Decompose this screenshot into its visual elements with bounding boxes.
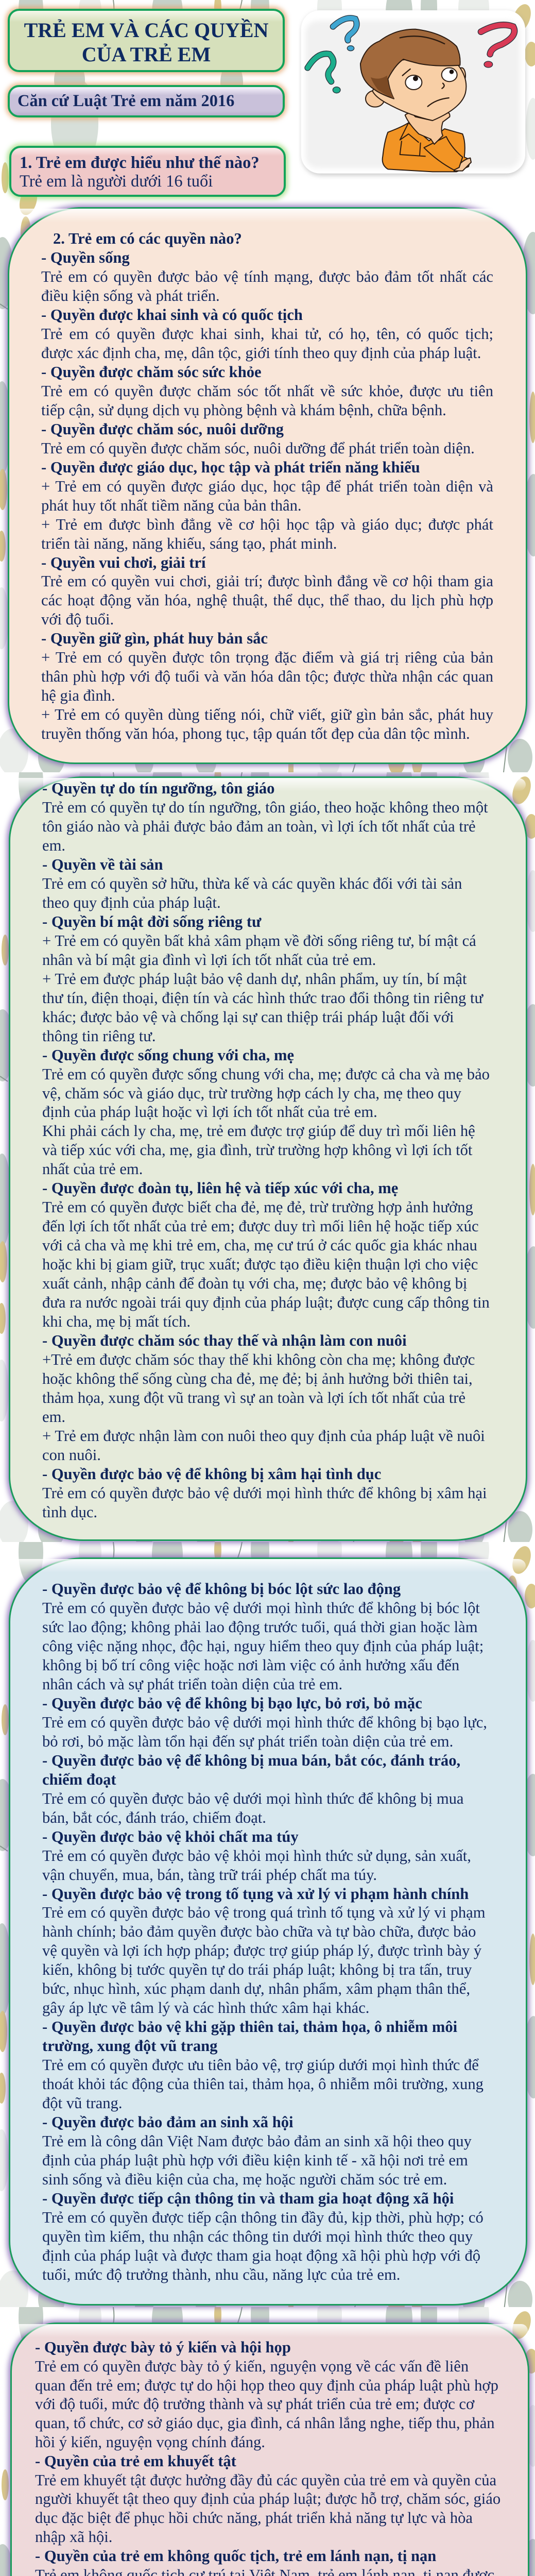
rights text list 3: bán, bắt cóc, đánh tráo, chiếm đoạt. xyxy=(42,1809,266,1826)
rights text list 1: các hoạt động văn hóa, nghệ thuật, thể dục, thể thao, du lịch phù hợp xyxy=(41,591,493,609)
rights text list 3: trường, xung đột vũ trang xyxy=(42,2037,217,2055)
title xyxy=(8,9,285,72)
rights text list 1: tiếp cận, sử dụng dịch vụ phòng bệnh và khám bệnh, chữa bệnh. xyxy=(41,401,446,419)
rights text list 2: Trẻ em có quyền tự do tín ngưỡng, tôn giáo, theo hoặc không theo một xyxy=(42,799,488,816)
rights text list 1: Trẻ em có quyền được bảo vệ tính mạng, được bảo đảm tốt nhất các xyxy=(41,268,493,285)
panel: rights part 2 xyxy=(9,776,527,1541)
rights text list 2: đưa ra nước ngoài trái quy định của pháp luật; được cung cấp thông tin xyxy=(42,1294,490,1311)
rights text list 1: - Quyền được chăm sóc sức khỏe xyxy=(41,363,262,381)
rights text list 2: - Quyền bí mật đời sống riêng tư xyxy=(42,913,261,930)
rights text list 2: xuất cảnh, nhập cảnh để đoàn tụ với cha, mẹ; được bảo vệ không bị xyxy=(42,1275,467,1292)
rights text list 4: người khuyết tật theo quy định của pháp luật; được hỗ trợ, chăm sóc, giáo xyxy=(35,2490,501,2507)
rights text list 2: Khi phải cách ly cha, mẹ, trẻ em được trợ giúp để duy trì mối liên hệ xyxy=(42,1122,475,1140)
rights text list 4: với độ tuổi, mức độ trưởng thành và sự phát triển của trẻ em; được cơ xyxy=(35,2395,474,2413)
rights text list 1: + Trẻ em có quyền được tôn trọng đặc điểm và giá trị riêng của bản xyxy=(41,649,493,666)
rights text list 2: hoặc không thể sống cùng cha đẻ, mẹ đẻ; bị ảnh hưởng bởi thiên tai, xyxy=(42,1370,473,1387)
rights text list 2: - Quyền được bảo vệ để không bị xâm hại tình dục xyxy=(42,1465,381,1483)
rights text list 3: - Quyền được bảo vệ khi gặp thiên tai, thảm họa, ô nhiễm môi xyxy=(42,2018,457,2036)
rights text list 2: thư tín, điện thoại, điện tín và các hình thức trao đổi thông tin riêng tư xyxy=(42,989,483,1007)
rights text list 3: Trẻ em có quyền được bảo vệ khỏi mọi hình thức sử dụng, sản xuất, xyxy=(42,1847,471,1865)
rights text list 2: khi cha, mẹ bị mất tích. xyxy=(42,1313,191,1330)
rights text list 1: Trẻ em có quyền được chăm sóc tốt nhất về sức khỏe, được ưu tiên xyxy=(41,382,493,400)
rights text list 1: - Quyền được khai sinh và có quốc tịch xyxy=(41,306,303,324)
rights text list 3: vận chuyển, mua, bán, tàng trữ trái phép chất ma túy. xyxy=(42,1866,377,1884)
rights text list 1: triển tài năng, năng khiếu, sáng tạo, phát minh. xyxy=(41,535,337,552)
rights text list 3: sức lao động; không phải lao động trước tuổi, quá thời gian hoặc làm xyxy=(42,1618,478,1636)
rights text list 2: định của pháp luật hoặc vì lợi ích tốt nhất của trẻ em. xyxy=(42,1103,377,1121)
rights text list 3: - Quyền được bảo vệ để không bị bạo lực, bỏ rơi, bỏ mặc xyxy=(42,1694,422,1712)
rights text list 3: chiếm đoạt xyxy=(42,1771,116,1788)
question 1 box xyxy=(9,146,286,197)
rights text list 3: đột vũ trang. xyxy=(42,2094,123,2112)
rights text list 2: vệ, chăm sóc và giáo dục, trừ trường hợp cách ly cha, mẹ theo quy xyxy=(42,1084,461,1101)
rights text list 2: Trẻ em có quyền được bảo vệ dưới mọi hình thức để không bị xâm hại xyxy=(42,1484,487,1502)
rights text list 1: - Quyền được chăm sóc, nuôi dưỡng xyxy=(41,420,284,438)
rights text list 4: Trẻ em có quyền được bày tỏ ý kiến, nguyện vọng về các vấn đề liên xyxy=(35,2358,469,2375)
rights text list 2: thông tin riêng tư. xyxy=(42,1027,156,1045)
rights text list 4: hồi ý kiến, nguyện vọng chính đáng. xyxy=(35,2433,265,2451)
rights text list 2: + Trẻ em có quyền bất khả xâm phạm về đời sống riêng tư, bí mật cá xyxy=(42,932,476,950)
rights text list 3: - Quyền được bảo vệ trong tố tụng và xử lý vi phạm hành chính xyxy=(42,1885,469,1902)
rights text list 2: - Quyền được đoàn tụ, liên hệ và tiếp xúc với cha, mẹ xyxy=(42,1179,398,1197)
rights text list 1: hệ gia đình. xyxy=(41,687,115,704)
rights text list 1: - Quyền vui chơi, giải trí xyxy=(41,553,206,571)
rights text list 3: Trẻ em có quyền được tiếp cận thông tin đầy đủ, kịp thời, phù hợp; có xyxy=(42,2209,484,2226)
subtitle: legal basis: Căn cứ Luật Trẻ em năm 2016 xyxy=(18,92,234,110)
rights text list 2: đến lợi ích tốt nhất của trẻ em; được duy trì mối liên hệ hoặc tiếp xúc xyxy=(42,1217,479,1235)
rights text list 2: và tiếp xúc với cha, mẹ, gia đình, trừ trường hợp không vì lợi ích tốt xyxy=(42,1141,472,1159)
rights text list 1: Trẻ em có quyền vui chơi, giải trí; được bình đẳng về cơ hội tham gia xyxy=(41,572,493,590)
rights text list 4 xyxy=(35,2338,501,2576)
rights text list 3: định của pháp luật và được tham gia hoạt động xã hội phù hợp với độ xyxy=(42,2247,480,2264)
rights text list 1: thân phù hợp với độ tuổi và văn hóa dân tộc; được thừa nhận các quan xyxy=(41,668,493,685)
rights text list 2: tôn giáo nào và phải được bảo đảm an toàn, vì lợi ích tốt nhất của trẻ xyxy=(42,818,476,835)
rights text list 2: con nuôi. xyxy=(42,1446,101,1464)
rights text list 3: quyền tìm kiếm, thu nhận các thông tin dưới mọi hình thức theo quy xyxy=(42,2228,473,2245)
rights text list 3: - Quyền được bảo vệ khỏi chất ma túy xyxy=(42,1828,299,1845)
rights text list 3: nhân cách và sự phát triển toàn diện của trẻ em. xyxy=(42,1675,342,1693)
rights text list 4: quan, tổ chức, cơ sở giáo dục, gia đình, cá nhân lắng nghe, tiếp thu, phản xyxy=(35,2414,495,2432)
rights text list 4: Trẻ em khuyết tật được hưởng đầy đủ các quyền của trẻ em và quyền của xyxy=(35,2471,496,2489)
rights text list 3: gây áp lực về tâm lý và các hình thức xâm hại khác. xyxy=(42,1999,369,2016)
heading: question 2: 2. Trẻ em có các quyền nào? xyxy=(53,230,242,247)
rights text list 3: - Quyền được bảo vệ để không bị bóc lột sức lao động xyxy=(42,1580,401,1598)
rights text list 2: Trẻ em có quyền sở hữu, thừa kế và các quyền khác đối với tài sản xyxy=(42,875,462,892)
rights text list 3: - Quyền được tiếp cận thông tin và tham gia hoạt động xã hội xyxy=(42,2190,454,2207)
title: CỦA TRẺ EM xyxy=(82,43,211,66)
rights text list 2: tình dục. xyxy=(42,1503,97,1521)
rights text list 1: Trẻ em có quyền được chăm sóc, nuôi dưỡng để phát triển toàn diện. xyxy=(41,439,475,457)
rights text list 1: - Quyền sống xyxy=(41,249,130,266)
rights text list 2: Trẻ em có quyền được biết cha đẻ, mẹ đẻ, trừ trường hợp ảnh hưởng xyxy=(42,1198,473,1216)
rights text list 3: kiến, không bị tước quyền tự do trái pháp luật; không bị tra tấn, truy xyxy=(42,1961,472,1978)
rights text list 3: Trẻ em có quyền được bảo vệ dưới mọi hình thức để không bị bạo lực, xyxy=(42,1714,487,1731)
rights text list 3: Trẻ em có quyền được bảo vệ dưới mọi hình thức để không bị bóc lột xyxy=(42,1599,480,1617)
rights text list 1: điều kiện sống và phát triển. xyxy=(41,287,220,304)
rights text list 1: - Quyền giữ gìn, phát huy bản sắc xyxy=(41,630,268,647)
rights text list 2: theo quy định của pháp luật. xyxy=(42,894,221,911)
rights text list 1: phát huy tốt nhất tiềm năng của bản thân. xyxy=(41,497,302,514)
rights text list 1: Trẻ em có quyền được khai sinh, khai tử, có họ, tên, có quốc tịch; xyxy=(41,325,493,343)
question 1 answer: Trẻ em là người dưới 16 tuổi xyxy=(20,172,213,191)
rights text list 3: hành chính; bảo đảm quyền được bào chữa và tự bào chữa, được bảo xyxy=(42,1923,476,1940)
rights text list 2: Trẻ em có quyền được sống chung với cha, mẹ; được cả cha và mẹ bảo xyxy=(42,1065,490,1083)
rights text list 4: quan đến trẻ em; được tự do hội họp theo quy định của pháp luật phù hợp xyxy=(35,2377,498,2394)
rights text list 4: nhập xã hội. xyxy=(35,2528,112,2546)
rights text list 3: bỏ rơi, bỏ mặc làm tổn hại đến sự phát triển toàn diện của trẻ em. xyxy=(42,1733,453,1750)
rights text list 2: - Quyền tự do tín ngưỡng, tôn giáo xyxy=(42,779,274,797)
rights text list 3: thoát khỏi tác động của thiên tai, thảm họa, ô nhiễm môi trường, xung xyxy=(42,2075,484,2093)
rights text list 3: sinh sống và điều kiện của cha, mẹ hoặc người chăm sóc trẻ em. xyxy=(42,2171,447,2188)
rights text list 3: Trẻ em là công dân Việt Nam được bảo đảm an sinh xã hội theo quy xyxy=(42,2132,472,2150)
rights text list 3: vệ quyền và lợi ích hợp pháp; được trợ giúp pháp lý, được trình bày ý xyxy=(42,1942,481,1959)
rights text list 3: không bị bố trí công việc hoặc nơi làm việc có ảnh hưởng xấu đến xyxy=(42,1656,459,1674)
rights text list 2: với cả cha và mẹ khi trẻ em, cha, mẹ cư trú ở các quốc gia khác nhau xyxy=(42,1236,477,1254)
rights text list 1: truyền thống văn hóa, phong tục, tập quán tốt đẹp của dân tộc mình. xyxy=(41,725,470,742)
rights text list 4: - Quyền của trẻ em không quốc tịch, trẻ em lánh nạn, tị nạn xyxy=(35,2547,436,2565)
rights text list 1: với độ tuổi. xyxy=(41,611,114,628)
rights text list 2: em. xyxy=(42,1408,65,1426)
rights text list 2: + Trẻ em được nhận làm con nuôi theo quy định của pháp luật về nuôi xyxy=(42,1427,485,1445)
rights text list 3: Trẻ em có quyền được bảo vệ trong quá trình tố tụng và xử lý vi phạm xyxy=(42,1904,485,1921)
rights text list 4: dục đặc biệt để phục hồi chức năng, phát triển khả năng tự lực và hòa xyxy=(35,2509,473,2527)
rights text list 2: +Trẻ em được chăm sóc thay thế khi không còn cha mẹ; không được xyxy=(42,1351,475,1368)
rights text list 1: + Trẻ em có quyền được giáo dục, học tập để phát triển toàn diện và xyxy=(41,478,493,495)
rights text list 3: Trẻ em có quyền được bảo vệ dưới mọi hình thức để không bị mua xyxy=(42,1790,463,1807)
rights text list 3: bức, nhục hình, xúc phạm danh dự, nhân phẩm, xâm phạm thân thể, xyxy=(42,1980,470,1997)
rights text list 1 xyxy=(41,249,493,742)
panel: rights part 4 xyxy=(10,2323,529,2576)
rights text list 2: - Quyền được sống chung với cha, mẹ xyxy=(42,1046,294,1064)
panel: rights part 1 xyxy=(8,207,527,764)
rights text list 3: - Quyền được bảo vệ để không bị mua bán, bắt cóc, đánh tráo, xyxy=(42,1752,460,1769)
rights text list 3: công việc nặng nhọc, độc hại, nguy hiểm theo quy định của pháp luật; xyxy=(42,1637,484,1655)
rights text list 2: em. xyxy=(42,837,65,854)
rights text list 2: - Quyền được chăm sóc thay thế và nhận làm con nuôi xyxy=(42,1332,407,1349)
rights text list 3: tuổi, mức độ trưởng thành, nhu cầu, năng lực của trẻ em. xyxy=(42,2266,400,2283)
rights text list 1: được xác định cha, mẹ, dân tộc, giới tính theo quy định của pháp luật. xyxy=(41,344,481,362)
rights text list 2: hoặc khi bị giam giữ, trục xuất; được tạo điều kiện thuận lợi cho việc xyxy=(42,1256,478,1273)
rights text list 2: khác; được bảo vệ và chống lại sự can thiệp trái pháp luật đối với xyxy=(42,1008,454,1026)
rights text list 1: + Trẻ em được bình đẳng về cơ hội học tập và giáo dục; được phát xyxy=(41,516,493,533)
illustration: thinking boy with question marks xyxy=(300,9,528,178)
question 1 heading: 1. Trẻ em được hiểu như thế nào? xyxy=(20,154,260,172)
rights text list 4: - Quyền được bày tỏ ý kiến và hội họp xyxy=(35,2338,291,2356)
rights text list 2 xyxy=(42,779,490,1521)
rights text list 1: + Trẻ em có quyền dùng tiếng nói, chữ viết, giữ gìn bản sắc, phát huy xyxy=(41,706,493,723)
rights text list 3 xyxy=(42,1580,487,2283)
subtitle: legal basis xyxy=(8,85,285,117)
rights text list 3: - Quyền được bảo đảm an sinh xã hội xyxy=(42,2113,294,2131)
panel: rights part 3 xyxy=(9,1557,527,2306)
rights text list 3: định của pháp luật phù hợp với điều kiện kinh tế - xã hội nơi trẻ em xyxy=(42,2151,468,2169)
rights text list 2: - Quyền về tài sản xyxy=(42,856,163,873)
rights text list 1: - Quyền được giáo dục, học tập và phát triển năng khiếu xyxy=(41,459,420,476)
rights text list 2: nhân và bí mật gia đình vì lợi ích tốt nhất của trẻ em. xyxy=(42,951,376,969)
rights text list 3: Trẻ em có quyền được ưu tiên bảo vệ, trợ giúp dưới mọi hình thức để xyxy=(42,2056,479,2074)
rights text list 2: thảm họa, xung đột vũ trang vì sự an toàn và lợi ích tốt nhất của trẻ xyxy=(42,1389,465,1406)
rights text list 4: - Quyền của trẻ em khuyết tật xyxy=(35,2452,236,2470)
title: TRẺ EM VÀ CÁC QUYỀN xyxy=(24,19,268,42)
rights text list 2: nhất của trẻ em. xyxy=(42,1160,143,1178)
rights text list 2: + Trẻ em được pháp luật bảo vệ danh dự, nhân phẩm, uy tín, bí mật xyxy=(42,970,467,988)
